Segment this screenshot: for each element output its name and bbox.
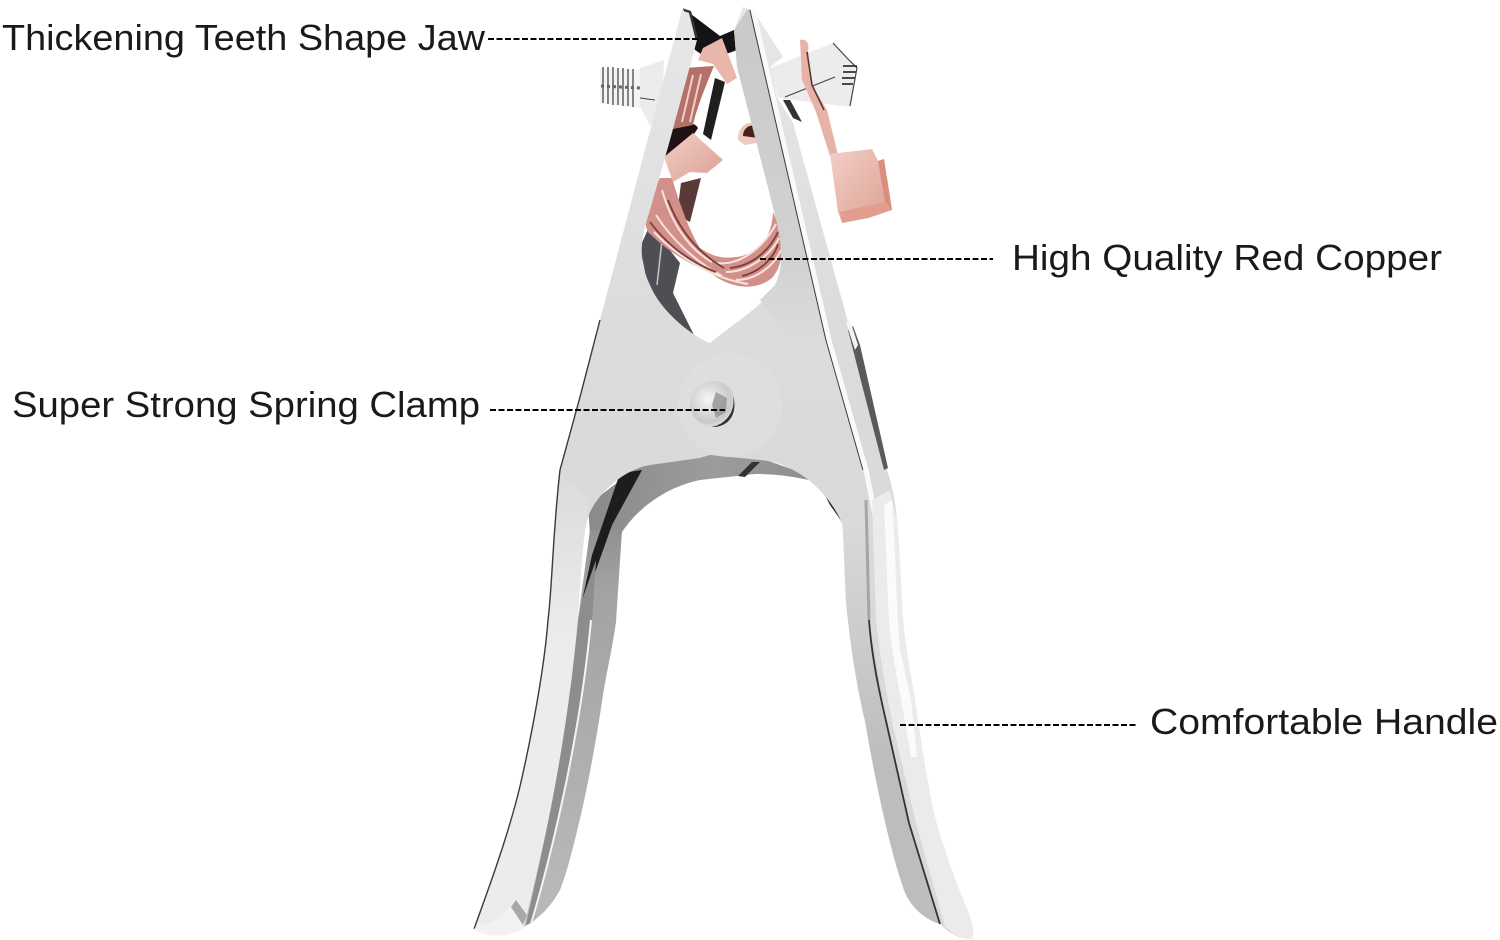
right handle [843, 490, 973, 939]
icon: left bolt [600, 60, 664, 126]
pivot rivet [678, 353, 782, 457]
left jaw edge line [684, 10, 697, 40]
left handle front plate [474, 320, 600, 936]
copper lug and top clip [664, 38, 737, 182]
copper braid wire [645, 66, 782, 287]
callout: jaw: Thickening Teeth Shape Jaw [2, 17, 486, 58]
handle back shading under the arch [524, 452, 843, 927]
callout: spring: Super Strong Spring Clamp [12, 384, 480, 425]
clamp body [474, 7, 973, 939]
icon: copper terminal lug on right [800, 40, 892, 223]
right jaw and arm stripes [734, 10, 888, 520]
back of the clamp: dark inner shading [640, 8, 762, 337]
callout: handle: Comfortable Handle [1150, 701, 1498, 742]
icon: right bolt and nut [770, 43, 857, 122]
callout: copper: High Quality Red Copper [1012, 237, 1442, 278]
